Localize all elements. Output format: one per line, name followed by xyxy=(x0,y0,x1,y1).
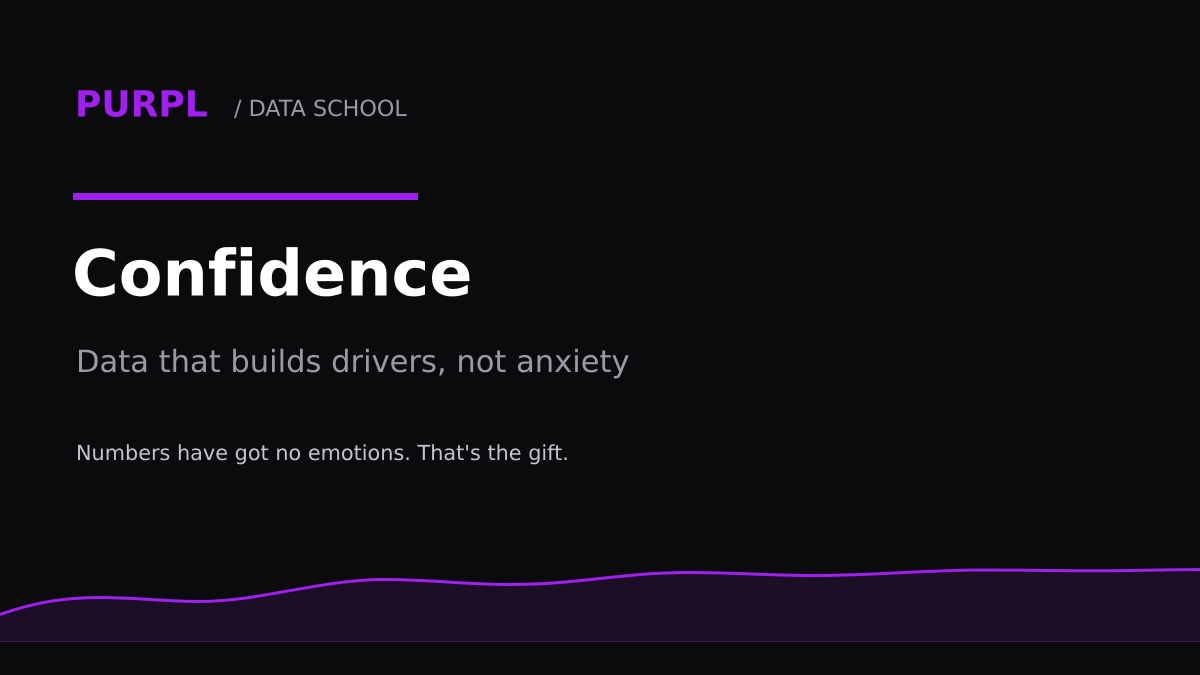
accent bar xyxy=(73,193,418,200)
chart area fill xyxy=(0,570,1200,641)
brand subtitle: data school: / DATA SCHOOL xyxy=(234,96,407,122)
body line: Numbers have got no emotions. That's the gift. xyxy=(76,441,569,465)
chart line xyxy=(0,570,1200,614)
subtitle: Data that builds drivers, not anxiety xyxy=(76,345,630,380)
chart baseline xyxy=(0,641,1200,642)
title: Confidence xyxy=(72,238,472,312)
brand logo: PURPL: PURPL xyxy=(75,84,208,126)
area chart: rising confidence line xyxy=(0,570,1200,642)
